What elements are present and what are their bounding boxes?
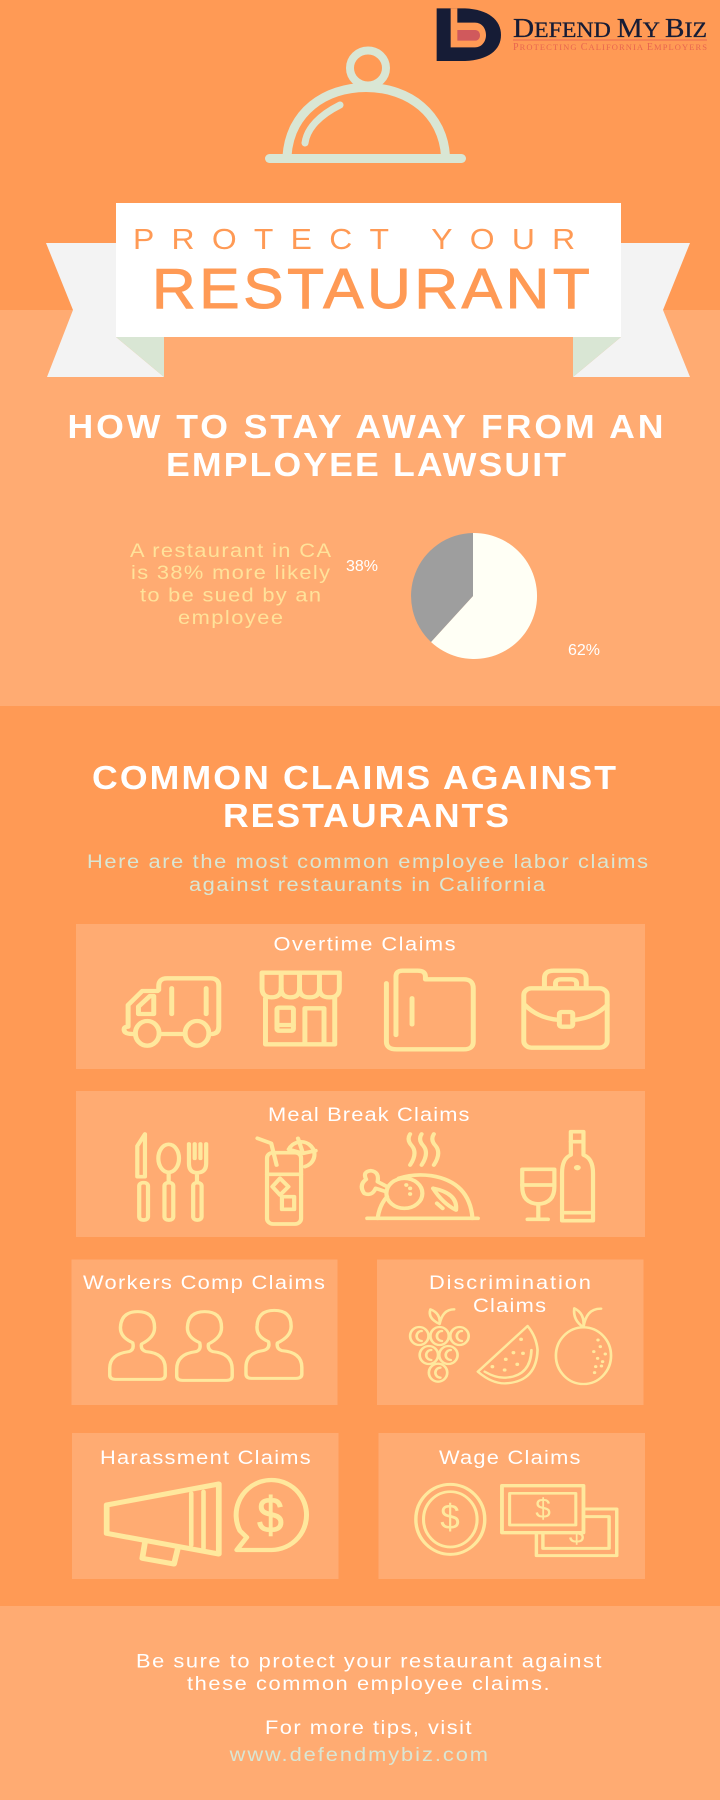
panel background bbox=[377, 1260, 644, 1405]
panel: harassment claims bbox=[72, 1433, 338, 1579]
icon: coin bbox=[416, 1484, 485, 1554]
icon: folder bbox=[386, 971, 473, 1049]
heading: common claims: RESTAURANTS bbox=[223, 798, 509, 835]
text: 38% more likely: A restaurant in CA bbox=[130, 540, 331, 562]
logo tagline: PROTECTING CALIFORNIA EMPLOYERS bbox=[513, 42, 707, 53]
footer message: Be sure to protect your restaurant against bbox=[136, 1651, 602, 1672]
icon: briefcase bbox=[524, 971, 607, 1048]
icon: orange bbox=[556, 1308, 611, 1384]
panel: meal break claims bbox=[76, 1091, 645, 1237]
heading: how to stay away: EMPLOYEE LAWSUIT bbox=[166, 447, 566, 484]
icon: banknotes: $ bbox=[535, 1493, 551, 1524]
heading: how to stay away: HOW TO STAY AWAY FROM AN bbox=[68, 409, 664, 446]
icons: truck, shop, folder, briefcase bbox=[124, 971, 607, 1049]
icons: three people bbox=[110, 1310, 302, 1380]
footer website: www.defendmybiz.com bbox=[229, 1744, 488, 1766]
ribbon white face bbox=[116, 203, 621, 337]
panel label: Harassment Claims bbox=[100, 1447, 311, 1469]
ribbon left tail bbox=[46, 243, 164, 377]
panel background bbox=[76, 1091, 645, 1237]
title line 2: RESTAURANT bbox=[152, 258, 590, 321]
logo: Defend My Biz bbox=[437, 8, 707, 61]
panel label: Overtime Claims bbox=[274, 934, 456, 955]
background: top orange band bbox=[0, 0, 720, 310]
heading: common claims bbox=[92, 760, 616, 835]
icon: banknotes bbox=[502, 1486, 617, 1556]
pie slice 38% bbox=[411, 533, 473, 642]
icon: speech bubble with dollar: $ bbox=[257, 1488, 284, 1543]
panel label: Discrimination bbox=[429, 1272, 591, 1294]
panel: common claims section background bbox=[0, 706, 720, 1606]
icon: watermelon bbox=[478, 1326, 538, 1383]
footer message: For more tips, visit bbox=[265, 1717, 472, 1739]
icons: cutlery, drink, roast, wine bbox=[137, 1132, 593, 1224]
heading: how to stay away bbox=[68, 409, 664, 484]
icon: banknotes: $ bbox=[569, 1518, 585, 1549]
panel: workers comp claims bbox=[72, 1260, 338, 1405]
panel label: Claims bbox=[473, 1295, 546, 1317]
panel label: Wage Claims bbox=[439, 1447, 580, 1469]
panel background bbox=[72, 1433, 338, 1579]
panel label: Meal Break Claims bbox=[268, 1104, 469, 1126]
pie chart: 38% / 62% bbox=[346, 533, 600, 659]
text: intro to common claims bbox=[87, 851, 648, 896]
logo rule bbox=[513, 40, 707, 41]
panel: lawsuit section background bbox=[0, 310, 720, 706]
panel: wage claims bbox=[378, 1433, 645, 1579]
panel: discrimination claims bbox=[377, 1260, 644, 1405]
text: intro to common claims: against restaurants in California bbox=[189, 874, 546, 896]
ribbon right fold bbox=[573, 337, 621, 377]
panel background bbox=[76, 924, 645, 1069]
panel label bbox=[429, 1272, 591, 1317]
icon: wine and bottle bbox=[522, 1132, 593, 1221]
icon: megaphone bbox=[107, 1484, 219, 1564]
pie slice 62% bbox=[431, 533, 537, 659]
icons: grapes, watermelon, orange bbox=[410, 1308, 611, 1384]
icon: coin: $ bbox=[440, 1498, 460, 1537]
text: 38% more likely: is 38% more likely bbox=[131, 562, 331, 584]
icon: drink bbox=[257, 1138, 316, 1224]
logo mark bbox=[437, 8, 501, 61]
panel background bbox=[378, 1433, 645, 1579]
text: intro to common claims: Here are the most common employee labor claims bbox=[87, 851, 648, 873]
pie label 38%: 38% bbox=[346, 558, 378, 575]
icon: roast chicken bbox=[362, 1134, 478, 1218]
text: 38% more likely: to be sued by an bbox=[140, 585, 321, 606]
panel: overtime claims bbox=[76, 924, 645, 1069]
ribbon right tail bbox=[573, 243, 690, 377]
title line 1: PROTECT YOUR bbox=[133, 223, 575, 256]
panel: footer background bbox=[0, 1606, 720, 1800]
footer text bbox=[136, 1651, 602, 1766]
pie label 62%: 62% bbox=[568, 642, 600, 659]
icon: speech bubble with dollar bbox=[236, 1480, 307, 1550]
icon: shop bbox=[262, 973, 339, 1044]
panel label: Workers Comp Claims bbox=[83, 1272, 325, 1294]
text: 38% more likely bbox=[130, 540, 331, 629]
icon: serving cloche bbox=[265, 50, 466, 163]
icon: cutlery bbox=[137, 1134, 206, 1220]
panel background bbox=[72, 1260, 338, 1405]
heading: common claims: COMMON CLAIMS AGAINST bbox=[92, 760, 616, 797]
icon: truck bbox=[124, 978, 219, 1046]
footer message: these common employee claims. bbox=[187, 1673, 550, 1695]
text: 38% more likely: employee bbox=[178, 607, 283, 629]
logo wordmark: DEFEND MY BIZ bbox=[513, 13, 707, 43]
ribbon left fold bbox=[116, 337, 164, 377]
footer message bbox=[136, 1651, 602, 1739]
icon: grapes bbox=[410, 1309, 469, 1382]
banner ribbon with title bbox=[46, 203, 690, 377]
